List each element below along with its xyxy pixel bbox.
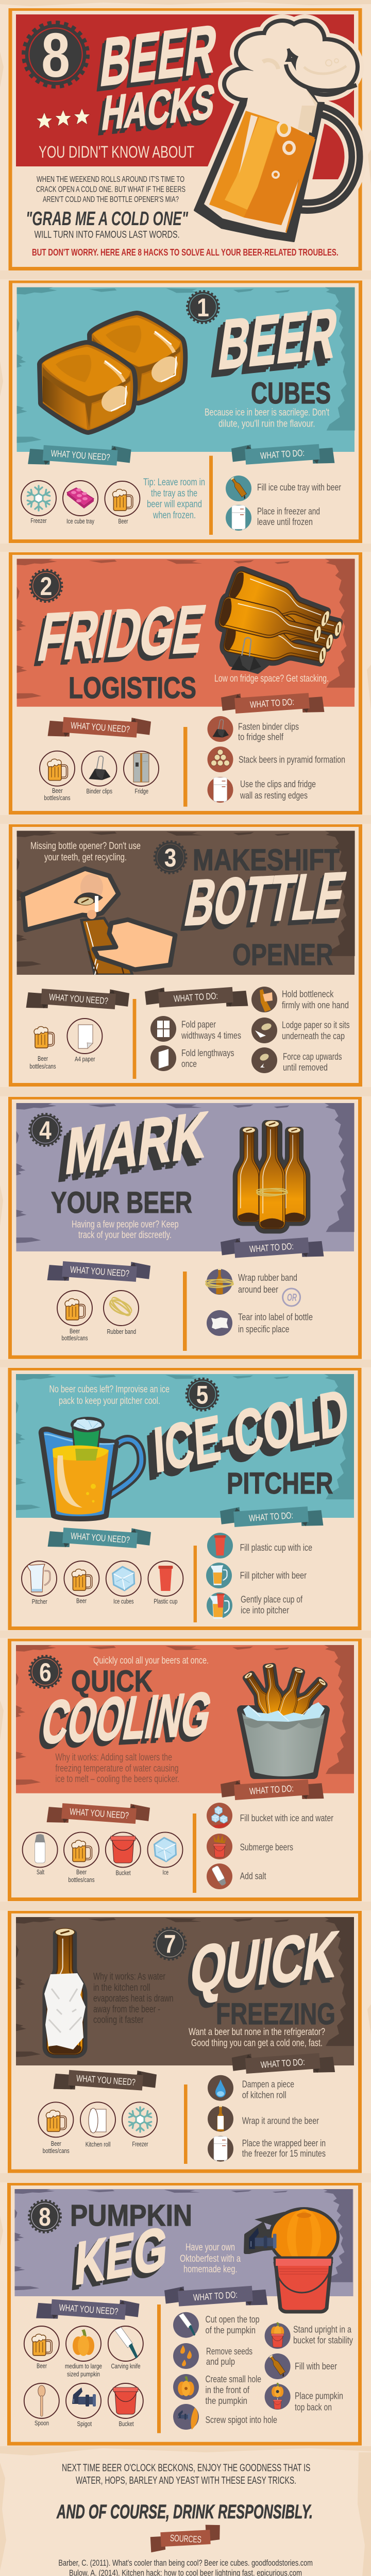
- step: stack beers: [207, 747, 345, 772]
- step: tear label: in specific place: [238, 1324, 290, 1334]
- ribbon: what you need: WHAT YOU NEED?: [70, 1531, 130, 1545]
- ribbon: what to do: WHAT TO DO:: [249, 1783, 294, 1797]
- item: ice cube tray: Ice cube tray: [66, 517, 94, 525]
- badge: number 6: [30, 1656, 61, 1687]
- item: freezer: Freezer: [132, 2140, 148, 2148]
- heading: pumpkin keg: KEG: [73, 2213, 170, 2298]
- item: plastic cup: Plastic cup: [154, 1598, 177, 1605]
- step: fill with beer: [265, 2353, 337, 2379]
- illustration: stacked bottles and binder clip: [217, 570, 345, 672]
- step: freezer: Place the wrapped beer in: [242, 2138, 326, 2148]
- step: fold paper widthways: Fold paper: [181, 1019, 216, 1030]
- badge: number 3: [155, 842, 186, 873]
- ribbon: what to do: WHAT TO DO:: [249, 697, 295, 710]
- step: fill tray: Fill ice cube tray with beer: [257, 482, 341, 493]
- item: beer: Beer: [76, 1597, 87, 1605]
- item: beer: [64, 1561, 99, 1605]
- ribbon: what you need: [47, 1256, 150, 1287]
- explanation text: Why it works: Adding salt lowers the: [55, 1752, 172, 1763]
- step: freeze: Place in freezer and: [257, 506, 320, 516]
- step: remove seeds: Remove seeds: [206, 2346, 252, 2357]
- step: fill bucket: [207, 1803, 333, 1828]
- item: pumpkin: [65, 2326, 102, 2378]
- badge: number 1: 1: [197, 293, 209, 322]
- intro text: WILL TURN INTO FAMOUS LAST WORDS.: [35, 229, 180, 241]
- ribbon: what you need: WHAT YOU NEED?: [48, 992, 109, 1006]
- intro text: Have your own: [185, 2242, 235, 2253]
- badge: number 4: [30, 1114, 61, 1145]
- explanation text: evaporates heat is drawn: [93, 1993, 173, 2004]
- item: salt: [23, 1832, 58, 1876]
- step: remove seeds: and pulp: [206, 2356, 235, 2367]
- item: carving knife: Carving knife: [111, 2362, 140, 2370]
- panel: hack 5 ice-cold pitcher: [8, 1368, 362, 1630]
- item: ice: Ice: [163, 1869, 168, 1876]
- item: ice cubes: [106, 1561, 141, 1605]
- tip: beer will expand: [147, 499, 202, 510]
- item: plastic cup: [148, 1561, 183, 1605]
- intro text: WHEN THE WEEKEND ROLLS AROUND IT'S TIME TO: [37, 175, 184, 184]
- ribbon: sources: SOURCES: [170, 2533, 201, 2545]
- item: spoon: Spoon: [35, 2419, 49, 2427]
- ribbon: what you need: WHAT YOU NEED?: [76, 2073, 136, 2088]
- item: beer: bottles/cans: [30, 1062, 56, 1070]
- step: create hole: Create small hole: [205, 2374, 261, 2384]
- item: bucket: Bucket: [115, 1869, 131, 1877]
- sources list: [58, 2558, 313, 2576]
- what you need: [21, 440, 205, 525]
- ribbon: what you need: [36, 2294, 140, 2325]
- item: spoon: [24, 2383, 59, 2427]
- illustration: three bottles with rubber band: [237, 1121, 306, 1229]
- intro text: homemade keg.: [183, 2264, 237, 2275]
- step: fold paper widthways: widthways 4 times: [181, 1030, 241, 1041]
- intro text: [30, 840, 141, 863]
- heading: quick freezing: FREEZING: [216, 1997, 335, 2031]
- step: place cup: Gently place cup of: [241, 1594, 303, 1605]
- tip: when frozen.: [153, 510, 196, 521]
- ribbon: what to do: [145, 982, 248, 1013]
- item: beer: bottles/cans: [62, 1334, 88, 1342]
- step: wrap rubber band: Wrap rubber band: [238, 1272, 297, 1283]
- panel: hack 6 quick cooling: [8, 1639, 362, 1901]
- ribbon: what to do: WHAT TO DO:: [248, 1510, 294, 1523]
- item: ice cubes: Ice cubes: [113, 1598, 134, 1605]
- item: ice: [147, 1832, 182, 1876]
- item: bucket: Bucket: [119, 2420, 134, 2428]
- step: cut top: [173, 2312, 260, 2338]
- step: dampen: of kitchen roll: [242, 2090, 286, 2100]
- step: stand upright: bucket for stability: [293, 2335, 353, 2346]
- callout: or: [283, 1289, 300, 1306]
- title: beer hacks: HACKS: [99, 74, 218, 140]
- step: freeze: leave until frozen: [257, 516, 313, 527]
- badge: number 5: [187, 1379, 218, 1410]
- heading: beer cubes: [214, 294, 342, 410]
- illustration: bottle wrapped in kitchen roll: [44, 1928, 86, 2055]
- panel: hack 3 makeshift bottle opener: [9, 824, 362, 1087]
- item: beer: Beer: [52, 787, 63, 794]
- item: binder clips: [81, 751, 116, 795]
- step: stand upright: Stand upright in a: [293, 2324, 352, 2335]
- item: kitchen roll: Kitchen roll: [86, 2141, 110, 2148]
- step: create hole: the pumpkin: [205, 2395, 247, 2406]
- intro text: [180, 2242, 241, 2275]
- item: a4 paper: A4 paper: [75, 1055, 95, 1063]
- ribbon: what you need: [48, 1522, 151, 1554]
- step: fill cup: [207, 1533, 312, 1558]
- item: beer: bottles/cans: [43, 2147, 70, 2155]
- tip: Tip: Leave room in: [143, 477, 205, 488]
- step: fill with beer: Fill with beer: [295, 2361, 337, 2371]
- step: hold bottleneck: firmly with one hand: [282, 999, 349, 1010]
- explanation text: cooling it faster: [93, 2015, 144, 2026]
- explanation text: away from the beer -: [93, 2004, 160, 2015]
- intro text: [189, 2026, 325, 2049]
- step: fold paper widthways: [150, 1016, 241, 1042]
- item: beer: Beer: [119, 517, 128, 525]
- intro text: No beer cubes left? Improvise an ice: [49, 1384, 170, 1395]
- badge: number 2: 2: [40, 572, 52, 601]
- badge: number 3: 3: [164, 843, 176, 872]
- step: fill tray: [226, 476, 341, 501]
- item: beer: Beer: [51, 2140, 61, 2147]
- item: pumpkin: sized pumpkin: [67, 2370, 100, 2378]
- item: beer: Beer: [37, 2362, 47, 2370]
- item: beer: [40, 751, 75, 802]
- heading: fridge logistics: LOGISTICS: [69, 671, 196, 705]
- item: spigot: [66, 2383, 101, 2428]
- title: beer hacks: [97, 10, 221, 140]
- item: beer: Beer: [76, 1868, 87, 1876]
- what to do: [206, 1501, 323, 1619]
- step: create hole: [173, 2374, 261, 2406]
- step: place cup: ice into pitcher: [241, 1605, 289, 1616]
- heading: quick cooling: [37, 1665, 217, 1757]
- ribbon: what to do: [231, 2048, 335, 2079]
- item: kitchen roll: [80, 2102, 115, 2148]
- step: force cap: [251, 1047, 342, 1073]
- item: beer: [24, 2326, 59, 2370]
- illustration: pitcher with ice cup: [41, 1418, 141, 1519]
- step: screw spigot: Screw spigot into hole: [205, 2414, 277, 2425]
- step: lodge paper: [251, 1018, 350, 1043]
- ribbon: what you need: WHAT YOU NEED?: [70, 1264, 130, 1279]
- step: force cap: until removed: [283, 1062, 328, 1073]
- explanation text: in the kitchen roll: [93, 1982, 150, 1993]
- illustration: pumpkin keg in bucket: [245, 2207, 340, 2312]
- what you need: [47, 1256, 150, 1342]
- step: wrap rubber band: around beer: [238, 1284, 278, 1295]
- tip: the tray as the: [151, 488, 197, 499]
- intro text: Good thing you can get a cold one, fast.: [191, 2038, 323, 2049]
- item: freezer: [21, 481, 56, 524]
- intro text: Because ice in beer is sacrilege. Don't: [205, 407, 329, 418]
- step: fill cup: Fill plastic cup with ice: [240, 1542, 312, 1553]
- ribbon: what to do: WHAT TO DO:: [173, 991, 218, 1004]
- item: beer: Beer: [70, 1327, 80, 1335]
- step: fold lengthways: Fold lengthways: [181, 1047, 234, 1058]
- step: screw spigot: [173, 2404, 277, 2430]
- intro text: Missing bottle opener? Don't use: [30, 840, 141, 852]
- step: submerge beers: Submerge beers: [240, 1841, 293, 1852]
- what you need: [24, 2294, 143, 2428]
- what you need: [22, 1522, 183, 1605]
- step: create hole: in the front of: [205, 2384, 250, 2395]
- item: bucket: [108, 2383, 143, 2428]
- intro text: your teeth, get recycling.: [44, 852, 127, 863]
- step: fasten clips: [207, 716, 299, 742]
- step: freezer: the freezer for 15 minutes: [242, 2148, 326, 2159]
- item: freezer: Freezer: [31, 517, 47, 524]
- heading: beer cubes: CUBES: [251, 377, 331, 410]
- step: resting edges: Use the clips and fridge: [240, 778, 316, 789]
- ribbon: what you need: [54, 2065, 157, 2096]
- item: beer: [57, 1291, 92, 1342]
- ribbon: sources: [150, 2524, 221, 2552]
- item: rubber band: Rubber band: [107, 1328, 136, 1335]
- step: cut top: Cut open the top: [205, 2314, 260, 2325]
- illustration: bottles in ice bucket: [241, 1663, 329, 1776]
- step: fasten clips: Fasten binder clips: [238, 721, 299, 732]
- what to do: [207, 688, 345, 803]
- step: fold lengthways: once: [181, 1058, 197, 1069]
- step: wrap: Wrap it around the beer: [242, 2115, 319, 2126]
- item: fridge: [124, 751, 159, 795]
- step: wrap: [208, 2106, 319, 2132]
- subtitle: YOU DIDN'T KNOW ABOUT: [39, 143, 194, 161]
- explanation text: Why it works: As water: [93, 1972, 165, 1982]
- badge: number 1: [188, 292, 218, 323]
- item: beer: [30, 1027, 56, 1070]
- item: spigot: Spigot: [77, 2420, 92, 2428]
- badge: number 8: [25, 20, 87, 90]
- heading: mark your beer: [51, 1097, 211, 1219]
- item: rubber band: [104, 1291, 139, 1335]
- ribbon: what to do: [221, 688, 324, 719]
- header red banner: [16, 14, 354, 179]
- explanation text: freezing temperature of water causing: [55, 1764, 179, 1774]
- illustration: hands opening bottle with paper: [23, 869, 175, 979]
- ribbon: what you need: [47, 1798, 150, 1829]
- illustration: beer ice cubes: [42, 315, 183, 430]
- step: place top: Place pumpkin: [295, 2391, 343, 2401]
- intro text: Oktoberfest with a: [180, 2253, 241, 2264]
- icon: three stars: [36, 108, 90, 129]
- step: tear label: Tear into label of bottle: [238, 1312, 313, 1323]
- badge: number 7: [154, 1928, 185, 1959]
- step: place cup: [207, 1592, 303, 1619]
- explanation text: [55, 1752, 179, 1785]
- step: freeze: [226, 505, 320, 531]
- heading: makeshift bottle opener: OPENER: [232, 938, 333, 972]
- step: cut top: of the pumpkin: [205, 2325, 256, 2335]
- what to do: [207, 1774, 333, 1889]
- intro text: [26, 175, 189, 241]
- intro text: Low on fridge space? Get stacking.: [214, 673, 329, 684]
- illustration: beer mug: [195, 23, 357, 241]
- heading: quick cooling: COOLING: [37, 1680, 217, 1757]
- what to do: [226, 439, 341, 531]
- step: hold bottleneck: [251, 987, 349, 1012]
- ribbon: what to do: [164, 2281, 267, 2312]
- ribbon: what you need: WHAT YOU NEED?: [70, 720, 130, 735]
- ribbon: what you need: WHAT YOU NEED?: [59, 2302, 119, 2317]
- ribbon: what to do: WHAT TO DO:: [193, 2290, 238, 2303]
- item: salt: Salt: [37, 1868, 44, 1876]
- intro text: AREN'T COLD AND THE BOTTLE OPENER'S MIA?: [43, 195, 179, 204]
- ribbon: what you need: [48, 712, 151, 743]
- step: place top: [265, 2383, 343, 2413]
- ribbon: what you need: WHAT YOU NEED?: [69, 1806, 129, 1821]
- badge: number 8: 8: [39, 2202, 51, 2231]
- heading: fridge logistics: [33, 591, 211, 705]
- what to do: [145, 982, 350, 1073]
- what to do: [208, 2048, 335, 2162]
- step: remove seeds: [173, 2343, 252, 2369]
- heading: quick freezing: [186, 1917, 343, 2031]
- step: stand upright: [265, 2322, 353, 2349]
- heading: quick cooling: QUICK: [71, 1665, 153, 1698]
- what to do: [164, 2281, 353, 2430]
- ribbon: what to do: [221, 1774, 324, 1806]
- step: add salt: Add salt: [240, 1870, 266, 1882]
- step: resting edges: [207, 777, 316, 803]
- panel: hack 7 quick freezing: [8, 1911, 362, 2173]
- step: tear label: [207, 1310, 313, 1336]
- what you need: [40, 712, 159, 802]
- item: pitcher: Pitcher: [32, 1598, 47, 1605]
- item: beer: [105, 481, 140, 525]
- intro text: pack to keep your pitcher cool.: [59, 1395, 160, 1406]
- heading: makeshift bottle opener: MAKESHIFT: [193, 843, 340, 877]
- what you need: [26, 984, 129, 1070]
- closing text: [62, 2463, 310, 2486]
- step: fill pitcher: [206, 1563, 307, 1588]
- intro text: "GRAB ME A COLD ONE": [26, 208, 189, 230]
- item: freezer: [122, 2102, 157, 2148]
- intro text: Having a few people over? Keep: [72, 1219, 179, 1230]
- panel: hack 8 pumpkin keg: [7, 2183, 362, 2446]
- panel: hack 4 mark your beer: [8, 1097, 362, 1359]
- ribbon: what to do: WHAT TO DO:: [260, 2057, 305, 2070]
- badge: number 6: 6: [39, 1658, 52, 1687]
- heading: pumpkin keg: PUMPKIN: [70, 2199, 192, 2232]
- step: place top: top back on: [295, 2402, 332, 2413]
- intro text: [205, 407, 329, 429]
- explanation text: [93, 1972, 173, 2026]
- step: wrap rubber band: [206, 1268, 297, 1295]
- item: binder clips: Binder clips: [87, 787, 112, 795]
- step: fill bucket: Fill bucket with ice and water: [240, 1812, 333, 1823]
- explanation text: ice to melt – cooling the beers quicker.: [55, 1774, 179, 1785]
- heading: makeshift bottle opener: [180, 843, 351, 972]
- badge: number 5: 5: [196, 1380, 208, 1409]
- title: beer hacks: BEER: [97, 10, 221, 100]
- item: a4 paper: [67, 1019, 102, 1063]
- item: bucket: [106, 1832, 141, 1877]
- heading: mark your beer: MARK: [62, 1097, 211, 1188]
- ribbon: what you need: WHAT YOU NEED?: [50, 448, 110, 463]
- step: lodge paper: underneath the cap: [282, 1030, 345, 1041]
- step: hold bottleneck: Hold bottleneck: [282, 989, 334, 999]
- intro text: Want a beer but none in the refrigerator?: [189, 2026, 325, 2038]
- step: force cap: Force cap upwards: [283, 1051, 342, 1062]
- badge: number 2: [30, 570, 62, 601]
- heading: ice-cold pitcher: [151, 1376, 350, 1500]
- badge: number 7: 7: [164, 1929, 176, 1958]
- intro text: dilute, you'll ruin the flavour.: [218, 418, 315, 429]
- step: add salt: [207, 1863, 266, 1889]
- ribbon: what you need: [26, 984, 129, 1015]
- item: pumpkin: medium to large: [65, 2362, 102, 2370]
- what to do: [206, 1232, 324, 1336]
- step: submerge beers: [207, 1834, 293, 1859]
- panel: hack 1 beer cubes: [9, 280, 362, 543]
- item: beer: bottles/cans: [44, 794, 71, 802]
- heading: fridge logistics: FRIDGE: [33, 591, 211, 675]
- step: freezer: [208, 2136, 326, 2162]
- intro text: Quickly cool all your beers at once.: [93, 1655, 209, 1666]
- item: beer: bottles/cans: [68, 1876, 95, 1884]
- step: lodge paper: Lodge paper so it sits: [282, 1020, 350, 1030]
- step: fold lengthways: [150, 1045, 234, 1071]
- ribbon: what to do: [220, 1501, 323, 1533]
- badge: number 8: [29, 2201, 60, 2232]
- callout: or: OR: [287, 1292, 297, 1303]
- step: fasten clips: to fridge shelf: [238, 732, 284, 742]
- item: carving knife: [108, 2326, 143, 2370]
- ribbon: what you need: [28, 440, 131, 471]
- intro text: [72, 1219, 179, 1241]
- intro text: track of your beer discreetly.: [78, 1229, 172, 1241]
- item: beer: [38, 2102, 73, 2155]
- item: beer: Beer: [38, 1055, 48, 1062]
- badge: number 4: 4: [39, 1116, 52, 1145]
- step: dampen: Dampen a piece: [242, 2079, 294, 2090]
- ribbon: what to do: [221, 1232, 324, 1263]
- what you need: [23, 1798, 182, 1884]
- item: ice cube tray: [63, 481, 98, 525]
- ribbon: what to do: WHAT TO DO:: [260, 448, 305, 461]
- item: fridge: Fridge: [135, 787, 148, 795]
- panel: header: [8, 8, 362, 270]
- step: dampen: [208, 2075, 294, 2101]
- panel: hack 2 fridge logistics: [9, 552, 362, 815]
- step: fill pitcher: Fill pitcher with beer: [240, 1570, 307, 1581]
- what you need: [38, 2065, 157, 2155]
- heading: mark your beer: YOUR BEER: [51, 1186, 192, 1219]
- ribbon: what to do: [231, 439, 334, 470]
- item: beer: [64, 1832, 99, 1884]
- badge: number 8: 8: [41, 20, 70, 90]
- ribbon: what to do: WHAT TO DO:: [249, 1241, 294, 1255]
- tip: [143, 477, 205, 521]
- item: pitcher: [22, 1561, 57, 1605]
- heading: ice-cold pitcher: PITCHER: [227, 1467, 333, 1500]
- intro text: CRACK OPEN A COLD ONE. BUT WHAT IF THE BEERS: [36, 185, 185, 194]
- step: resting edges: wall as resting edges: [240, 790, 308, 801]
- intro text: [49, 1384, 170, 1406]
